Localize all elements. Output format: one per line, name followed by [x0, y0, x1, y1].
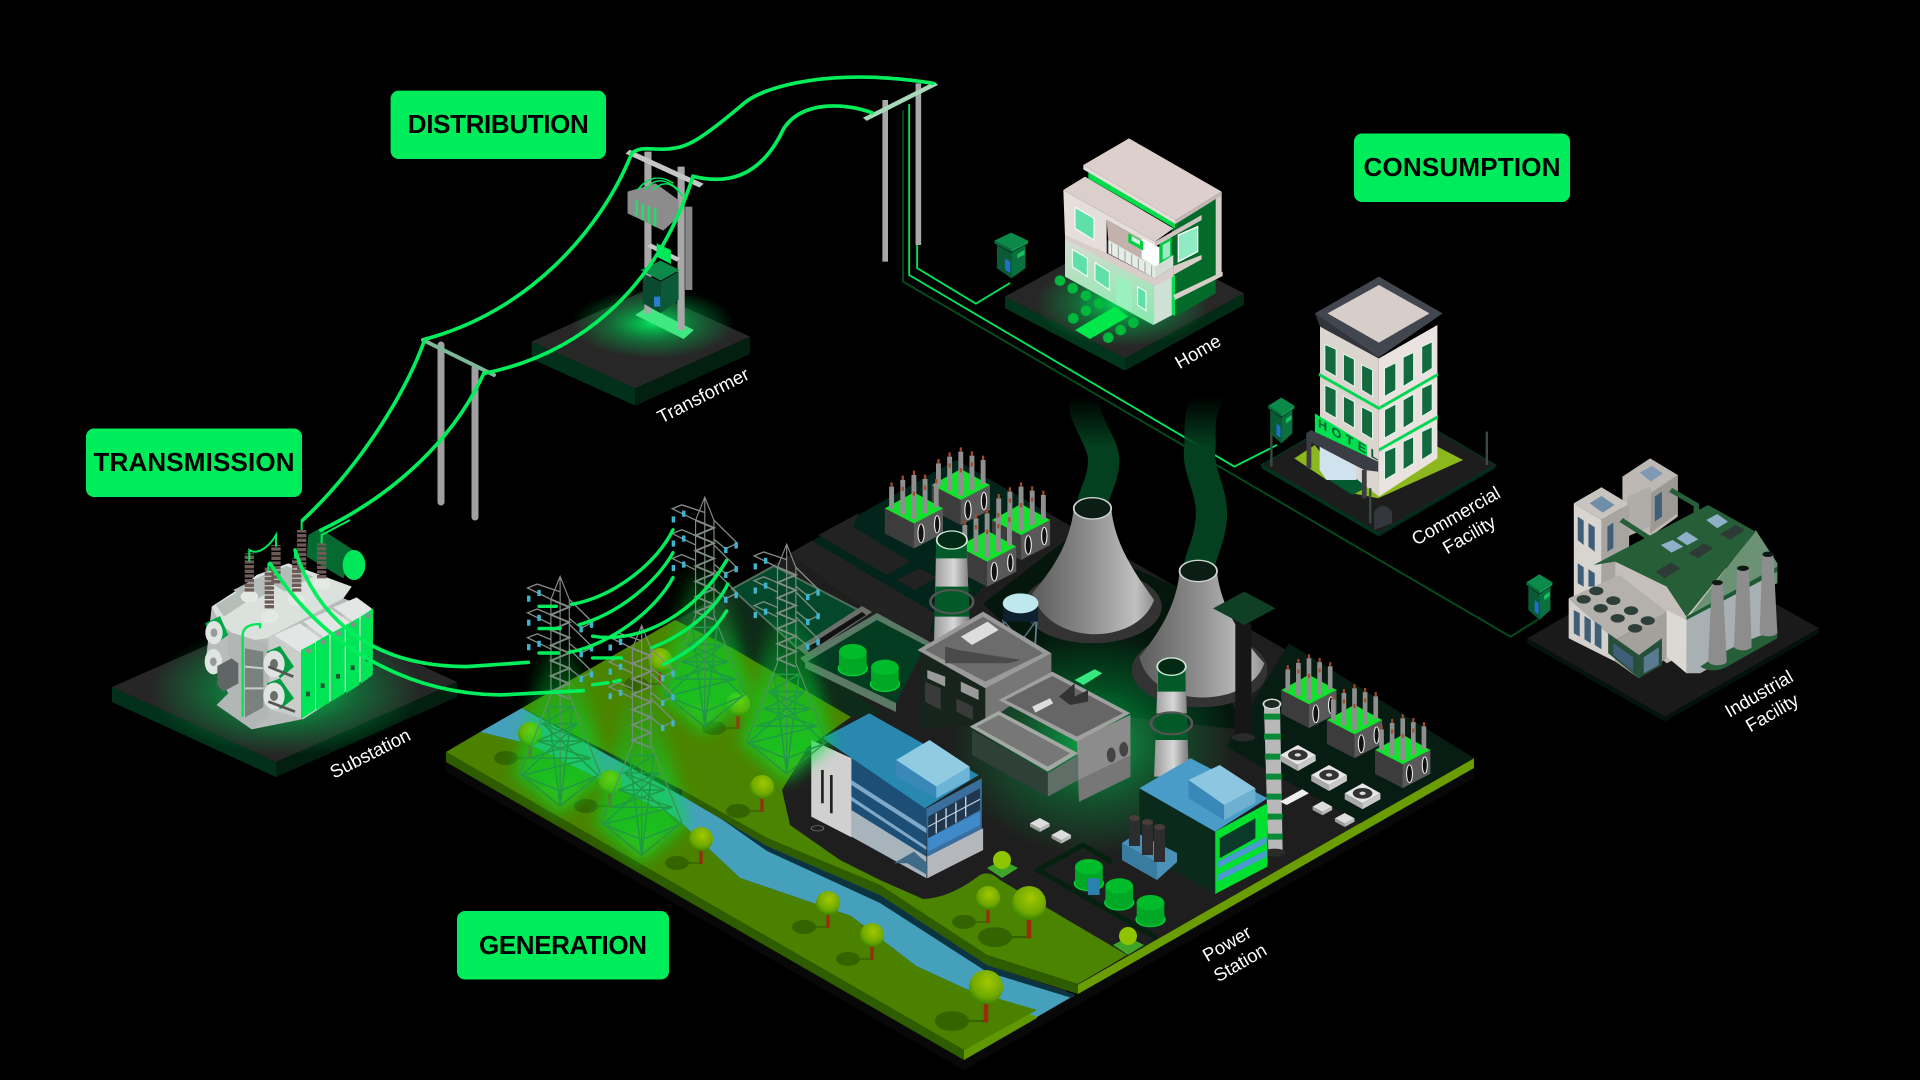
- panel: substation yard: [790, 460, 1047, 647]
- panel: tank pads: [732, 566, 930, 717]
- icon: blue office building: [811, 713, 983, 878]
- icon: chimneys and mast: [930, 531, 1285, 857]
- icon: cooling towers: [1023, 498, 1267, 707]
- caption: industrial facility: Facility: [1742, 689, 1803, 736]
- panel: green land and river: [446, 620, 1127, 1050]
- icon: substation transformers on site: [885, 447, 1430, 788]
- caption: transformer: Transformer: [654, 363, 752, 427]
- caption: power station: Power: [1199, 921, 1255, 966]
- road and pad areas of the plant: [950, 540, 1474, 857]
- icon: right blue building: [1139, 758, 1267, 894]
- panel: power station base: [446, 460, 1474, 1070]
- panel: home platform: [1005, 232, 1244, 371]
- heading: consumption: [1354, 134, 1570, 202]
- icon: home building: [1055, 138, 1223, 343]
- heading: transmission: TRANSMISSION: [94, 447, 294, 477]
- panel: substation platform: [112, 607, 457, 777]
- icon: transmission towers: [514, 497, 833, 863]
- panel: bottom tank yard: [1038, 845, 1157, 938]
- icon: central plant buildings: [917, 612, 1130, 802]
- icon: industrial building: [1569, 458, 1777, 678]
- caption: power station: Station: [1210, 939, 1270, 986]
- transmission and distribution wires: [302, 77, 933, 530]
- panel: commercial platform: [1262, 397, 1496, 537]
- caption: commercial facility: [1408, 482, 1515, 569]
- caption: industrial facility: [1721, 666, 1808, 741]
- utility pole pair: distribution: [865, 83, 936, 262]
- tower to tower wires: [539, 530, 728, 685]
- icon: water tower: [1003, 593, 1038, 660]
- caption: commercial facility: Facility: [1439, 511, 1500, 558]
- heading: distribution: DISTRIBUTION: [408, 109, 589, 139]
- consumption feed lines: [903, 98, 1538, 637]
- icon: rooftop fans and small units: [1030, 745, 1380, 844]
- icon: commercial meter box: [1268, 398, 1294, 443]
- icon: trees: [494, 648, 1046, 1031]
- panel: industrial platform: [1527, 550, 1819, 722]
- icon: hotel building: [1271, 277, 1487, 530]
- caption: commercial facility: Commercial: [1408, 482, 1504, 549]
- heading: consumption: CONSUMPTION: [1364, 152, 1560, 182]
- substation to tower wires: [270, 550, 583, 695]
- heading: generation: GENERATION: [479, 930, 647, 960]
- utility pole pair: transmission: [423, 340, 494, 517]
- icon: green bushes: [987, 851, 1144, 955]
- heading: distribution: [391, 91, 606, 159]
- icon: industrial meter box: [1526, 574, 1552, 620]
- icon: home meter box: [994, 233, 1028, 278]
- panel: transformer platform: [532, 288, 750, 406]
- caption: home: Home: [1171, 330, 1224, 373]
- icon: substation power transformer: [205, 520, 373, 729]
- icon: hotel building: HOTEL: [1318, 416, 1383, 466]
- icon: storage tanks: [838, 644, 1166, 927]
- heading: generation: [457, 911, 669, 980]
- caption: substation: Substation: [326, 724, 414, 782]
- heading: transmission: [86, 428, 302, 497]
- caption: industrial facility: Industrial: [1721, 666, 1797, 721]
- icon: pole-mounted transformer: [628, 152, 702, 339]
- icon: small stack house: [1122, 815, 1177, 880]
- icon: steam plumes: [1085, 393, 1211, 571]
- caption: power station: [1198, 919, 1270, 986]
